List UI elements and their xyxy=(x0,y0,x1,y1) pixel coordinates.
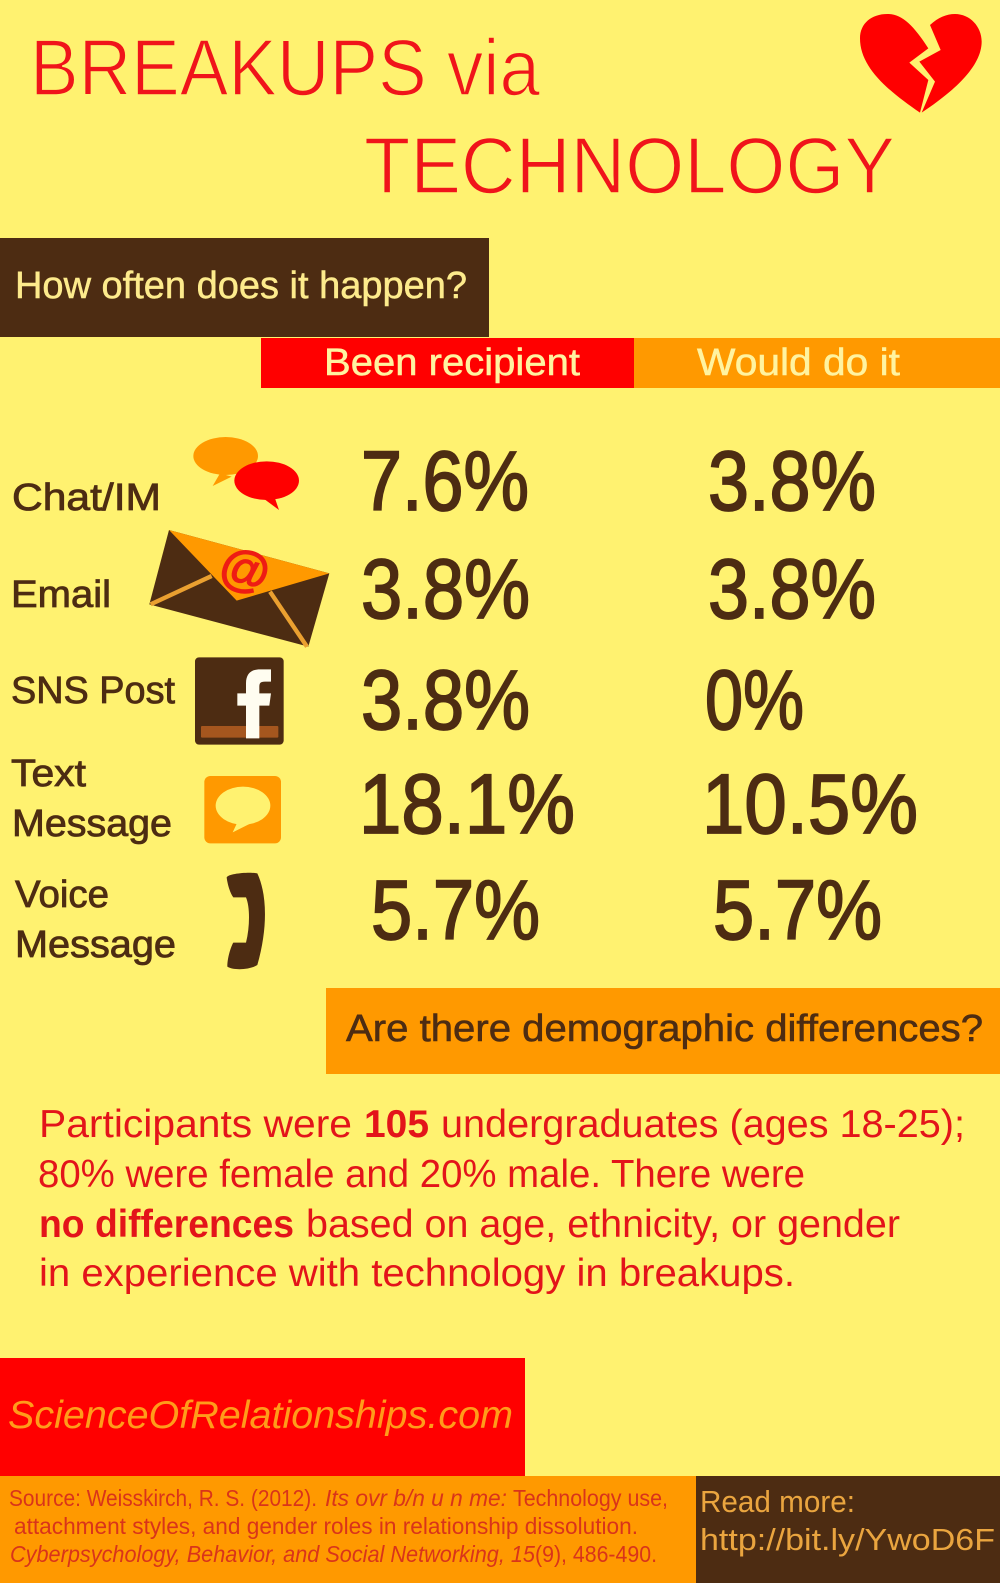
row: text message: Text xyxy=(11,753,86,795)
row: email: Email xyxy=(11,574,111,616)
row: email: 3.8% xyxy=(708,542,876,636)
row: email: 3.8% xyxy=(361,542,530,636)
column header: would do it xyxy=(634,338,1000,388)
source citation: (9), 486-490. xyxy=(535,1541,657,1567)
column header: would do it: Would do it xyxy=(697,342,900,384)
icon: speech bubble xyxy=(204,776,281,843)
icon: envelope: @ xyxy=(215,535,276,602)
row: text message: 10.5% xyxy=(702,757,918,851)
row: chat/IM: 7.6% xyxy=(361,434,529,528)
text block: participants: 80% were female and 20% male. There were xyxy=(38,1153,805,1196)
row: chat/IM: Chat/IM xyxy=(12,477,161,519)
text block: participants: based on age, ethnicity, or gender xyxy=(306,1203,900,1246)
heading: how often: How often does it happen? xyxy=(15,265,467,307)
text block: participants: undergraduates (ages 18-25); xyxy=(441,1103,965,1146)
read more link: http://bit.ly/YwoD6F xyxy=(700,1522,995,1557)
row: text message xyxy=(11,753,918,851)
row: email xyxy=(11,530,876,647)
row: voice message: 5.7% xyxy=(713,863,882,957)
read more link xyxy=(696,1476,1000,1583)
title xyxy=(30,23,895,210)
text block: participants: 105 xyxy=(364,1103,429,1146)
text block: participants: Participants were xyxy=(39,1103,352,1146)
banner: website xyxy=(0,1358,525,1476)
row: voice message: 5.7% xyxy=(371,863,540,957)
row: voice message xyxy=(15,863,882,969)
row: chat/IM xyxy=(12,434,876,528)
icon: broken heart xyxy=(860,14,982,113)
banner: website: ScienceOfRelationships.com xyxy=(8,1394,513,1437)
row: text message: 18.1% xyxy=(359,757,575,851)
row: text message: Message xyxy=(12,803,172,845)
row: SNS post: 0% xyxy=(705,653,804,747)
column header: been recipient: Been recipient xyxy=(324,342,580,384)
column header: been recipient xyxy=(261,338,634,388)
row: chat/IM: 3.8% xyxy=(708,434,876,528)
source citation xyxy=(0,1476,696,1583)
read more link: Read more: xyxy=(700,1484,855,1519)
icon: facebook xyxy=(195,657,284,745)
text block: participants xyxy=(38,1103,965,1295)
row: voice message: Voice xyxy=(15,874,109,916)
text block: participants: no differences xyxy=(39,1203,294,1246)
title: TECHNOLOGY xyxy=(364,121,895,210)
source citation: attachment styles, and gender roles in relationship dissolution. xyxy=(14,1513,638,1539)
source citation: Source: Weisskirch, R. S. (2012). xyxy=(9,1485,317,1511)
heading: demographic differences: Are there demographic differences? xyxy=(346,1008,983,1050)
row: SNS post: SNS Post xyxy=(11,670,175,712)
heading: demographic differences xyxy=(326,988,1000,1074)
heading: how often xyxy=(0,238,489,337)
source citation: Cyberpsychology, Behavior, and Social Networking, 15 xyxy=(10,1541,535,1567)
title: BREAKUPS via xyxy=(30,23,540,112)
icon: telephone handset xyxy=(227,873,265,969)
text block: participants: in experience with technology in breakups. xyxy=(39,1252,795,1295)
row: voice message: Message xyxy=(15,924,176,966)
row: SNS post: 3.8% xyxy=(361,653,530,747)
row: SNS post xyxy=(11,653,804,747)
source citation: Technology use, xyxy=(513,1485,668,1511)
icon: envelope xyxy=(149,530,329,647)
icon: chat bubbles xyxy=(193,437,299,510)
source citation: Its ovr b/n u n me: xyxy=(325,1485,507,1511)
